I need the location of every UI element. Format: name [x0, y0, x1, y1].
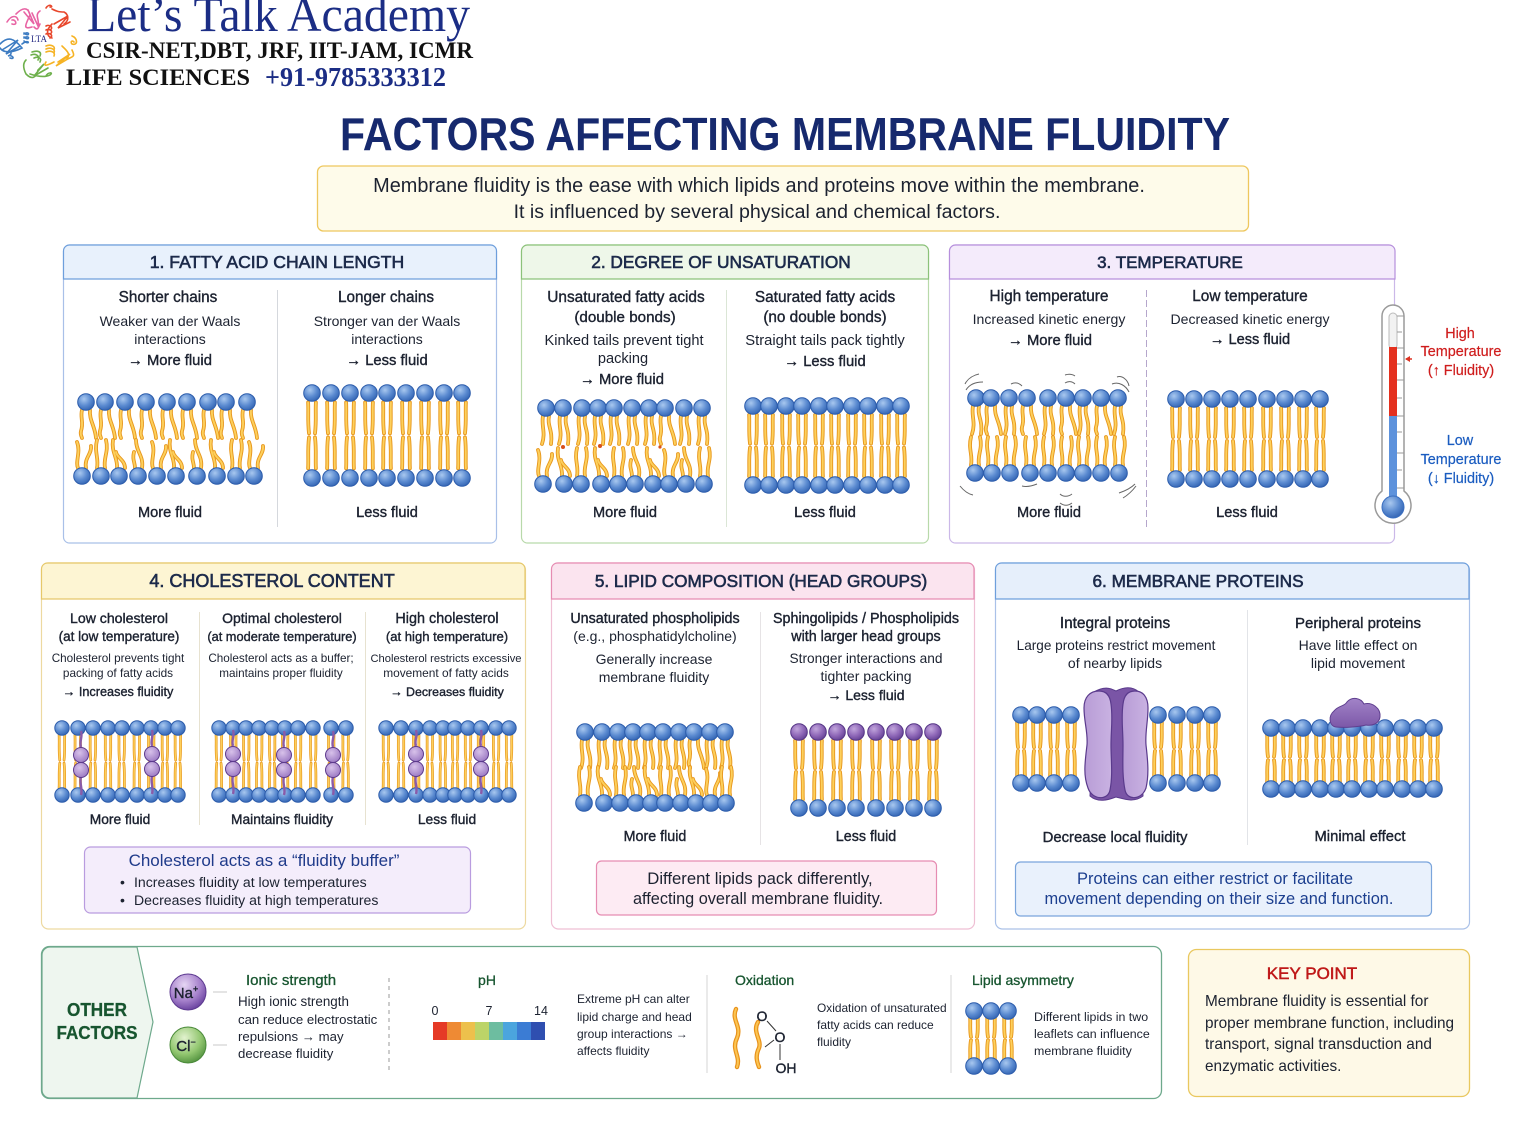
heading 3: 3. TEMPERATURE — [1097, 253, 1243, 272]
text: integral proteins: Integral proteins — [1060, 615, 1170, 632]
thermometer label: low — [1421, 433, 1501, 487]
logo: protein ribbon — [0, 5, 76, 77]
label: less fluid: Less fluid — [836, 829, 896, 845]
key point box — [1188, 950, 1470, 1096]
text: shorter chains: interactions — [134, 331, 206, 347]
thermometer label: low: Temperature — [1421, 452, 1501, 468]
text: low cholesterol: (at low temperature) — [59, 629, 179, 644]
text: shorter chains: Shorter chains — [119, 289, 218, 306]
text: longer chains: Longer chains — [338, 289, 434, 306]
cholesterol molecules — [226, 730, 340, 795]
text: peripheral proteins: Have little effect on — [1299, 637, 1417, 653]
heading 6: 6. MEMBRANE PROTEINS — [1092, 571, 1304, 591]
icon: sodium ion: + — [193, 984, 198, 994]
text: low temperature: Decreased kinetic energy — [1170, 311, 1330, 327]
asymmetry text: leaflets can influence — [1034, 1027, 1150, 1041]
label: less fluid: Less fluid — [356, 505, 418, 521]
text: high cholesterol: High cholesterol — [395, 611, 499, 627]
text: longer chains: Stronger van der Waals — [314, 313, 460, 329]
label: more fluid: More fluid — [593, 505, 657, 521]
bilayer: low temperature — [1168, 391, 1328, 487]
oxidation text: fluidity — [817, 1035, 851, 1049]
label: decrease local fluidity: Decrease local fluidity — [1043, 830, 1188, 846]
callout: lipids pack differently: affecting overall membrane fluidity. — [633, 890, 883, 908]
asymmetry text: Different lipids in two — [1034, 1010, 1148, 1024]
icon: chloride ion: − — [190, 1037, 196, 1047]
text: unsaturated phospholipids — [570, 611, 740, 685]
thermometer — [1375, 305, 1412, 523]
text: longer chains: interactions — [351, 331, 423, 347]
thermometer label: high: High — [1445, 326, 1475, 342]
heading 1: 1. FATTY ACID CHAIN LENGTH — [150, 252, 404, 272]
icon: chloride ion: Cl — [176, 1038, 190, 1055]
text: integral proteins: of nearby lipids — [1068, 655, 1162, 671]
key point box: enzymatic activities. — [1205, 1058, 1341, 1075]
text: longer chains — [314, 289, 460, 369]
text: unsaturated — [544, 289, 705, 388]
bilayer: unsaturated phospholipids — [576, 724, 734, 811]
bilayer: kinked tails — [535, 400, 712, 492]
pH text: group interactions → — [577, 1027, 688, 1041]
bilayer: short fluid chains — [74, 394, 263, 484]
callout: lipids pack differently: Different lipids pack differently, — [647, 869, 873, 888]
oxidation text: Oxidation of unsaturated — [817, 1001, 947, 1015]
bilayer with integral protein — [1013, 688, 1220, 800]
oxidation diagram: O — [757, 1008, 768, 1024]
key point box: Membrane fluidity is essential for — [1205, 993, 1428, 1010]
icon: sodium ion — [170, 974, 206, 1010]
title: FACTORS AFFECTING MEMBRANE FLUIDITY — [340, 108, 1230, 160]
text: optimal cholesterol — [207, 610, 357, 680]
text: shorter chains — [100, 289, 240, 369]
callout: proteins: movement depending on their size and function. — [1045, 890, 1393, 908]
text: unsaturated: → More fluid — [580, 372, 664, 388]
phone number: +91-9785333312 — [265, 62, 446, 92]
text: sphingolipids: → Less fluid — [827, 687, 905, 703]
callout: fluidity buffer: Cholesterol acts as a “fluidity buffer” — [129, 851, 400, 870]
text: unsaturated phospholipids: Unsaturated phospholipids — [570, 611, 740, 627]
panel: degree of unsaturation — [522, 245, 928, 543]
text: low cholesterol: Low cholesterol — [70, 610, 168, 626]
callout: proteins — [1016, 862, 1432, 916]
pH text — [577, 992, 692, 1058]
integral protein — [1084, 688, 1148, 800]
callout: fluidity buffer — [84, 847, 470, 913]
label: less fluid: Less fluid — [418, 812, 476, 827]
text: sphingolipids: Stronger interactions and — [790, 651, 942, 666]
key point box: transport, signal transduction and — [1205, 1036, 1432, 1053]
text: saturated: → Less fluid — [784, 354, 866, 370]
text: high cholesterol: Cholesterol restricts excessive — [370, 653, 522, 665]
text: high cholesterol: movement of fatty acids — [383, 666, 509, 680]
text: sphingolipids: Sphingolipids / Phospholipids — [773, 611, 959, 627]
text: saturated: Saturated fatty acids — [755, 289, 895, 306]
key point box: KEY POINT — [1267, 964, 1357, 983]
heading 5: 5. LIPID COMPOSITION (HEAD GROUPS) — [595, 571, 927, 591]
label: more fluid: More fluid — [138, 505, 202, 521]
ionic strength: decrease fluidity — [238, 1046, 334, 1061]
ionic strength: repulsions → may — [238, 1029, 344, 1044]
text: unsaturated: (double bonds) — [574, 309, 676, 326]
text: low cholesterol: Cholesterol prevents tight — [52, 652, 185, 665]
text: optimal cholesterol: Cholesterol acts as a buffer; — [208, 652, 354, 665]
text: saturated — [745, 289, 905, 370]
thermometer label: low: (↓ Fluidity) — [1428, 471, 1494, 487]
logo initials: LTA — [31, 34, 47, 44]
asymmetry text — [1034, 1010, 1150, 1058]
bilayer: high cholesterol — [379, 721, 516, 802]
text: low temperature — [1170, 288, 1330, 348]
asymmetry bilayer — [966, 1003, 1016, 1074]
pH scale: 7 — [486, 1004, 493, 1018]
callout: fluidity buffer: Increases fluidity at low temperatures — [134, 874, 367, 890]
text: saturated: Straight tails pack tightly — [745, 333, 905, 349]
oxidation diagram: O — [775, 1029, 786, 1045]
label: less fluid: Less fluid — [1216, 505, 1278, 521]
label: more fluid: More fluid — [624, 829, 686, 845]
label: less fluid: Less fluid — [794, 505, 856, 521]
label: more fluid: More fluid — [1017, 505, 1081, 521]
oxidation diagram — [735, 1008, 796, 1076]
text: saturated: (no double bonds) — [763, 309, 887, 326]
text: unsaturated: Unsaturated fatty acids — [547, 289, 705, 306]
text: high temperature: → More fluid — [1008, 333, 1092, 349]
bilayer: optimal cholesterol — [212, 721, 353, 802]
text: low temperature: → Less fluid — [1210, 332, 1290, 348]
text: integral proteins — [1017, 615, 1216, 671]
text: longer chains: → Less fluid — [346, 353, 428, 369]
heading 4: 4. CHOLESTEROL CONTENT — [149, 571, 395, 591]
oxidation text — [817, 1001, 947, 1049]
text: peripheral proteins — [1295, 615, 1421, 671]
text: peripheral proteins: Peripheral proteins — [1295, 615, 1421, 632]
bilayer: long packed chains — [304, 385, 470, 486]
pH scale: 14 — [534, 1004, 548, 1018]
text: unsaturated: packing — [598, 351, 648, 367]
text: peripheral proteins: lipid movement — [1311, 655, 1405, 671]
ionic strength: Ionic strength — [246, 972, 336, 989]
pH text: lipid charge and head — [577, 1010, 692, 1024]
text: optimal cholesterol: (at moderate temperature) — [207, 629, 357, 644]
icon: sodium ion: Na — [174, 985, 193, 1002]
pH text: affects fluidity — [577, 1044, 649, 1058]
chevron label: FACTORS — [56, 1022, 138, 1043]
text: optimal cholesterol: maintains proper fluidity — [219, 667, 343, 680]
callout: fluidity buffer: • — [120, 892, 125, 908]
text: unsaturated phospholipids: (e.g., phosphatidylcholine) — [573, 628, 737, 644]
peripheral protein — [1330, 698, 1380, 727]
pH scale: 0 — [432, 1004, 439, 1018]
panel: cholesterol content — [42, 563, 526, 929]
exam list: CSIR-NET,DBT, JRF, IIT-JAM, ICMR — [86, 38, 473, 63]
label: more fluid: More fluid — [90, 812, 150, 827]
thermometer label: high: (↑ Fluidity) — [1428, 363, 1494, 379]
text: low cholesterol: → Increases fluidity — [63, 685, 174, 699]
text: high temperature: High temperature — [990, 288, 1108, 305]
bilayer: purple large heads — [791, 724, 941, 816]
text: unsaturated phospholipids: Generally increase — [596, 651, 713, 667]
chevron label — [42, 947, 153, 1098]
text: optimal cholesterol: Optimal cholesterol — [222, 610, 342, 626]
thermometer label: low: Low — [1447, 433, 1474, 449]
label: maintains fluidity: Maintains fluidity — [231, 812, 333, 827]
thermometer label: high: Temperature — [1421, 344, 1501, 360]
pH scale — [432, 1004, 548, 1040]
ionic strength: High ionic strength — [238, 994, 349, 1009]
text: unsaturated phospholipids: membrane fluidity — [599, 669, 709, 685]
text: low cholesterol: packing of fatty acids — [63, 666, 173, 680]
panel: membrane proteins — [996, 563, 1470, 929]
bilayer with peripheral protein — [1263, 698, 1442, 797]
text: sphingolipids: tighter packing — [820, 668, 912, 684]
chevron label: OTHER — [67, 999, 127, 1020]
oxidation diagram: OH — [776, 1060, 796, 1076]
subtitle box: It is influenced by several physical and chemical factors. — [514, 201, 1000, 223]
text: high temperature: Increased kinetic energy — [973, 311, 1126, 327]
subtitle box: Membrane fluidity is the ease with which lipids and proteins move within the membrane. — [373, 175, 1145, 197]
text: shorter chains: → More fluid — [128, 353, 212, 369]
cholesterol molecules — [408, 730, 488, 794]
text: unsaturated: Kinked tails prevent tight — [544, 333, 704, 349]
life sciences label: LIFE SCIENCES — [66, 65, 250, 90]
subtitle box — [318, 166, 1248, 231]
ionic strength: can reduce electrostatic — [238, 1012, 378, 1027]
label: minimal effect: Minimal effect — [1314, 829, 1406, 845]
callout: lipids pack differently — [596, 861, 936, 915]
pH heading: pH — [478, 972, 496, 988]
text: high cholesterol — [370, 611, 522, 699]
bilayer: low cholesterol — [55, 721, 185, 802]
bilayer: high temperature with motion arcs — [960, 374, 1136, 505]
text: high cholesterol: (at high temperature) — [386, 629, 508, 644]
panel: other factors — [42, 946, 1162, 1098]
heading 2: 2. DEGREE OF UNSATURATION — [591, 252, 851, 272]
oxidation heading: Oxidation — [735, 972, 794, 988]
callout: fluidity buffer: • — [120, 874, 125, 890]
asymmetry heading: Lipid asymmetry — [972, 972, 1074, 988]
cholesterol molecules — [74, 730, 160, 795]
panel: temperature — [950, 245, 1395, 543]
text: low cholesterol — [52, 610, 185, 699]
text: high temperature — [973, 288, 1126, 349]
callout: proteins: Proteins can either restrict or facilitate — [1077, 870, 1353, 888]
pH text: Extreme pH can alter — [577, 992, 690, 1006]
text: shorter chains: Weaker van der Waals — [100, 313, 240, 329]
text: sphingolipids: with larger head groups — [790, 629, 941, 645]
callout: fluidity buffer: Decreases fluidity at high temperatures — [134, 892, 378, 908]
text: high cholesterol: → Decreases fluidity — [390, 685, 505, 699]
panel: lipid composition — [552, 563, 974, 929]
panel: fatty acid chain length — [64, 245, 496, 543]
text: low temperature: Low temperature — [1192, 288, 1308, 305]
asymmetry text: membrane fluidity — [1034, 1044, 1133, 1058]
icon: chloride ion — [170, 1027, 206, 1063]
ionic strength — [238, 972, 378, 1061]
thermometer label: high — [1421, 326, 1501, 379]
bilayer: straight tails — [745, 398, 909, 493]
oxidation text: fatty acids can reduce — [817, 1018, 934, 1032]
text: sphingolipids — [773, 611, 959, 703]
text: integral proteins: Large proteins restrict movement — [1017, 638, 1216, 653]
key point box: proper membrane function, including — [1205, 1015, 1454, 1032]
